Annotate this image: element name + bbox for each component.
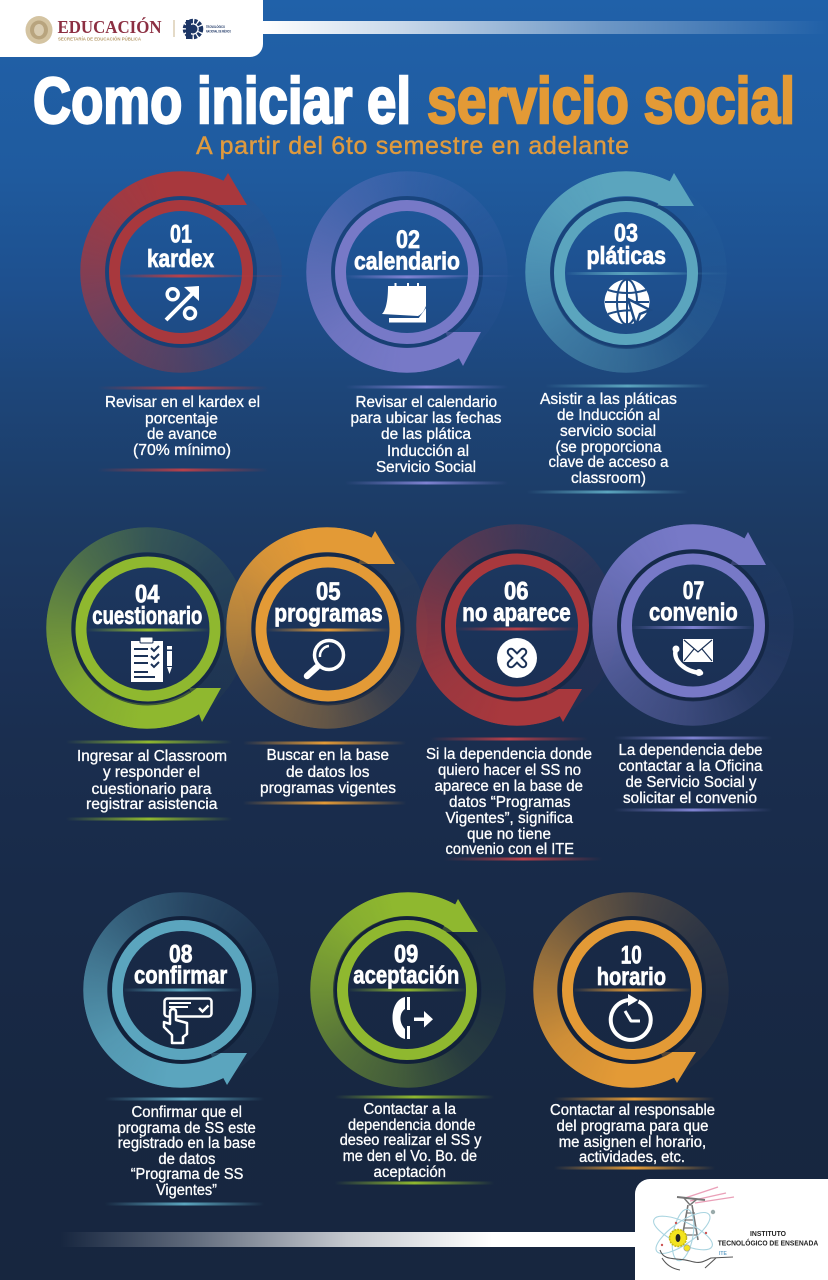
logo text: institute name: TECNOLÓGICO DE ENSENADA (718, 1238, 818, 1248)
text block 04: cuestionario para (92, 781, 212, 798)
icon: ITE emblem: ITE (719, 1251, 727, 1257)
step 10 horario: horario (597, 963, 666, 991)
icon: magnifier (307, 640, 344, 676)
text block 05: programas vigentes (260, 780, 396, 797)
icon: national crest (26, 16, 52, 44)
text block 04: y responder el (103, 764, 200, 781)
step 04 cuestionario (46, 527, 237, 729)
step 10 horario (533, 892, 728, 1088)
text block 01: (70% mínimo) (133, 442, 231, 459)
text block 06: quiero hacer el SS no (438, 762, 581, 779)
text block 08: Confirmar que el (132, 1104, 242, 1121)
icon: globe cursor (604, 279, 650, 325)
text block 03 (534, 384, 703, 494)
text block 03: de Inducción al (557, 407, 660, 424)
text block 10: del programa para que (556, 1118, 708, 1135)
step 07 convenio: 07 (683, 577, 704, 605)
step 08 confirmar: 08 (169, 941, 193, 969)
text block 01 (103, 386, 263, 472)
icon: TecNM gear (185, 20, 201, 39)
icon: phone with arrow (392, 997, 433, 1039)
step 02 calendario (306, 171, 507, 373)
step 01 kardex: kardex (147, 245, 214, 273)
text block 07: de Servicio Social y (626, 774, 757, 791)
text block 06: que no tiene (467, 826, 551, 843)
logo divider (174, 20, 175, 37)
step 09 aceptación (310, 892, 504, 1088)
header logo panel (0, 0, 263, 57)
icon: percent arrow (166, 286, 199, 320)
step 02 calendario: calendario (354, 248, 460, 276)
text block 10: actividades, etc. (579, 1149, 685, 1166)
icon: calendar (382, 283, 426, 322)
text block 07: contactar a la Oficina (618, 758, 763, 775)
text block 10 (550, 1098, 715, 1170)
text block 04: registrar asistencia (86, 796, 218, 813)
text block 01: Revisar en el kardex el (105, 394, 260, 411)
logo text: EDUCACIÓN: EDUCACIÓN (58, 16, 162, 37)
text block 02 (350, 386, 502, 484)
title (33, 64, 795, 137)
text block 07 (618, 736, 767, 812)
text block 05: Buscar en la base (266, 747, 389, 764)
bottom gradient bar (60, 1232, 636, 1247)
logo text: TecNM: TECNOLÓGICO (206, 24, 225, 29)
icon: clipboard checklist (131, 637, 172, 682)
text block 09: Contactar a la (364, 1101, 456, 1118)
step 07 convenio: convenio (649, 599, 738, 627)
text block 06: Si la dependencia donde (426, 746, 592, 763)
step 06 no aparece: no aparece (462, 599, 571, 627)
text block 03: classroom) (571, 470, 646, 487)
text block 06: aparece en la base de (434, 778, 583, 795)
text block 01: de avance (147, 426, 217, 443)
text block 04 (71, 740, 227, 820)
step 05 programas: programas (274, 600, 383, 628)
text block 09: me den el Vo. Bo. de (343, 1148, 477, 1165)
text block 02: para ubicar las fechas (350, 410, 502, 427)
step 09 aceptación: 09 (394, 941, 418, 969)
text block 02: Servicio Social (376, 459, 476, 476)
text block 08: “Programa de SS (131, 1166, 243, 1183)
logo text: secretaría: SECRETARÍA DE EDUCACIÓN PÚBLICA (58, 34, 142, 42)
icon: envelope and phone (672, 639, 713, 676)
logo text: institute name: INSTITUTO (750, 1229, 786, 1238)
step 01 kardex (80, 171, 282, 373)
text block 09 (340, 1096, 490, 1184)
text block 06: convenio con el ITE (446, 841, 574, 858)
text block 06: datos “Programas (449, 794, 571, 811)
step 03 pláticas: pláticas (586, 242, 666, 270)
step 04 cuestionario: 04 (135, 581, 160, 609)
text block 02: de las plática (381, 426, 471, 443)
title: Como iniciar el (33, 64, 411, 137)
step 08 confirmar (83, 892, 278, 1088)
text block 03: clave de acceso a (548, 454, 669, 471)
text block 09: deseo realizar el SS y (340, 1132, 482, 1149)
icon: hand tapping card (164, 998, 212, 1043)
text block 08: Vigentes” (156, 1182, 217, 1199)
step 03 pláticas (525, 171, 721, 373)
text block 03: servicio social (560, 423, 656, 440)
step 04 cuestionario: cuestionario (92, 602, 202, 630)
icon: ITE emblem (649, 1187, 734, 1270)
text block 06 (426, 738, 598, 860)
text block 08 (110, 1098, 259, 1206)
text block 09: dependencia donde (348, 1117, 476, 1134)
logo text: TecNM (206, 24, 231, 34)
text block 03: (se proporciona (556, 439, 662, 456)
text block 01: porcentaje (145, 410, 218, 428)
step 07 convenio (592, 524, 788, 726)
step 02 calendario: 02 (396, 226, 420, 254)
text block 10: me asignen el horario, (559, 1134, 706, 1151)
text block 05 (246, 742, 402, 804)
text block 07: La dependencia debe (618, 742, 762, 759)
step 08 confirmar: confirmar (134, 961, 228, 989)
text block 04: Ingresar al Classroom (77, 748, 227, 765)
icon: clock with arrow (611, 994, 651, 1040)
text block 08: registrado en la base (118, 1135, 256, 1152)
subtitle: A partir del 6to semestre en adelante (196, 132, 629, 160)
step 05 programas (226, 527, 422, 729)
text block 02: Inducción al (387, 443, 469, 460)
text block 09: aceptación (374, 1164, 446, 1181)
text block 10: Contactar al responsable (550, 1102, 715, 1119)
step 06 no aparece (416, 524, 605, 726)
step 05 programas: 05 (316, 578, 341, 606)
step 01 kardex: 01 (170, 220, 192, 248)
text block 06: Vigentes”, significa (446, 810, 573, 827)
text block 02: Revisar el calendario (356, 394, 497, 411)
step 10 horario: 10 (621, 941, 642, 969)
step 09 aceptación: aceptación (353, 961, 459, 989)
text block 03: Asistir a las pláticas (540, 391, 677, 408)
logo text: TecNM: NACIONAL DE MÉXICO (206, 28, 231, 34)
logo text: institute name (718, 1229, 818, 1248)
text block 05: de datos los (286, 764, 370, 781)
text block 07: solicitar el convenio (623, 790, 757, 807)
step 06 no aparece: 06 (504, 577, 528, 605)
text block 08: de datos (158, 1151, 216, 1168)
text block 08: programa de SS este (118, 1120, 256, 1137)
icon: cross in circle (497, 638, 537, 678)
ITE logo panel (635, 1179, 828, 1280)
step 03 pláticas: 03 (614, 220, 638, 248)
top gradient bar (263, 21, 828, 34)
